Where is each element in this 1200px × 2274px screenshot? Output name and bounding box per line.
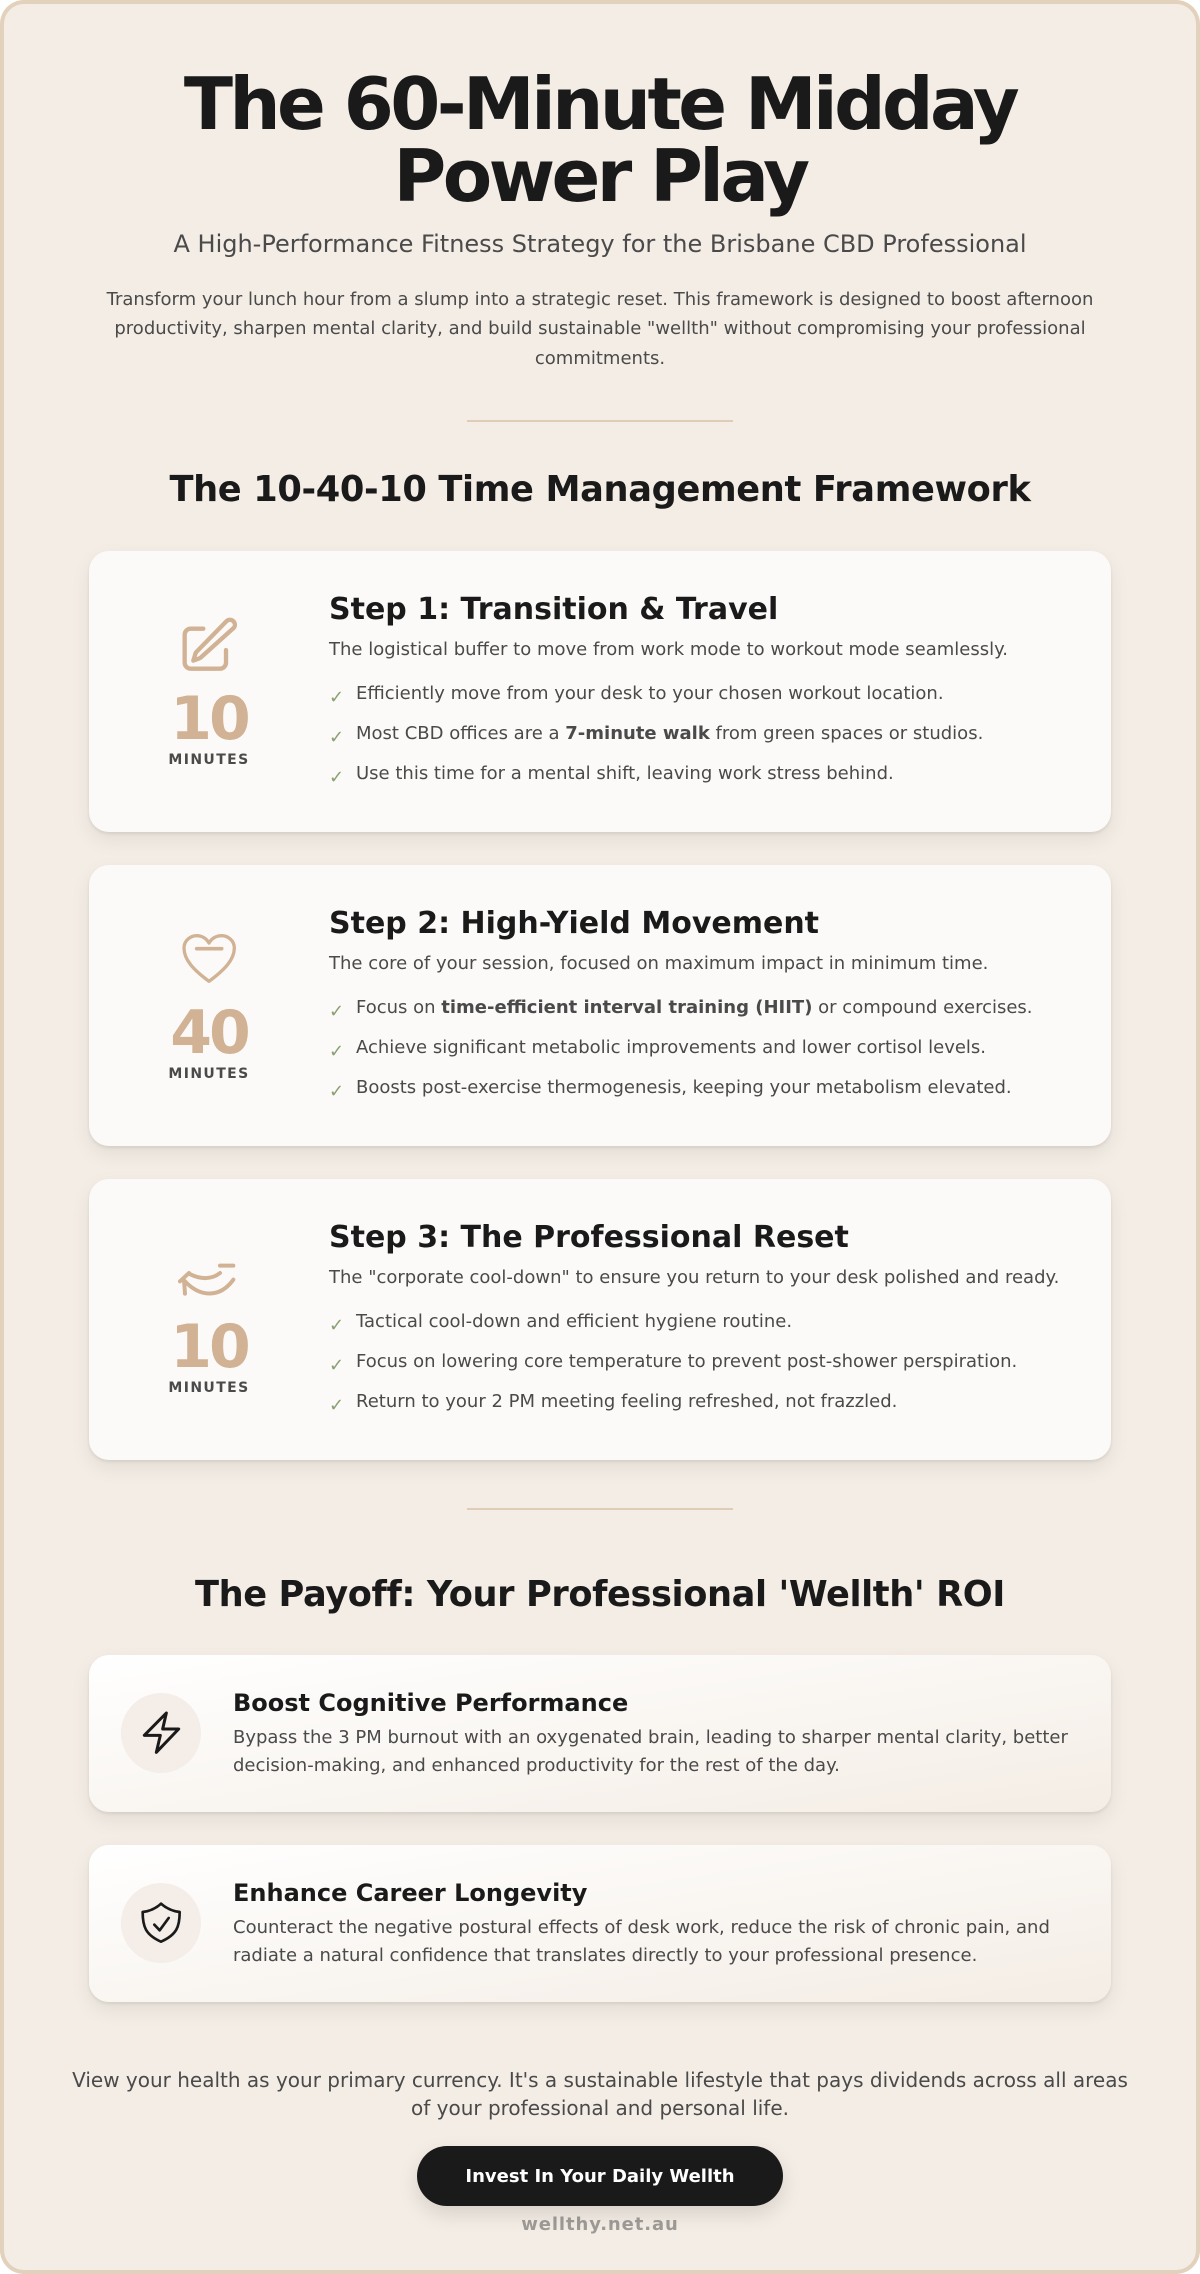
duration number: 40 [170, 998, 248, 1068]
panel: cognitive performance [89, 1655, 1111, 1812]
benefit text: Counteract the negative postural effects of desk work, reduce the risk of chronic pain, and [233, 1917, 1050, 1938]
title [184, 62, 1018, 218]
bullet: Most CBD offices are a 7-minute walk from green spaces or studios. [356, 723, 983, 744]
panel: step 3 [89, 1179, 1111, 1460]
step title: Step 2: High-Yield Movement [329, 906, 819, 941]
check: ✓ [329, 1041, 344, 1062]
benefit title: Enhance Career Longevity [233, 1879, 587, 1907]
icon: heart [182, 934, 236, 983]
closing text [72, 2068, 1128, 2120]
subtitle: A High-Performance Fitness Strategy for the Brisbane CBD Professional [173, 230, 1027, 258]
check: ✓ [329, 1001, 344, 1022]
panel: step 2 [89, 865, 1111, 1146]
closing text: View your health as your primary currency. It's a sustainable lifestyle that pays dividends across all areas [72, 2068, 1128, 2092]
intro paragraph: productivity, sharpen mental clarity, and build sustainable "wellth" without compromising your professional [114, 318, 1086, 339]
check: ✓ [329, 1395, 344, 1416]
intro paragraph: Transform your lunch hour from a slump into a strategic reset. This framework is designed to boost afternoon [107, 288, 1093, 310]
bullet: Efficiently move from your desk to your chosen workout location. [356, 683, 944, 704]
call-to-action button [417, 2146, 783, 2206]
check: ✓ [329, 767, 344, 788]
duration unit: MINUTES [168, 752, 250, 768]
duration unit: MINUTES [168, 1066, 250, 1082]
check: ✓ [329, 1355, 344, 1376]
website: wellthy.net.au [521, 2214, 679, 2235]
panel: career longevity [89, 1845, 1111, 2002]
bullet: Return to your 2 PM meeting feeling refreshed, not frazzled. [356, 1391, 897, 1412]
bullet: Focus on lowering core temperature to prevent post-shower perspiration. [356, 1351, 1017, 1372]
icon: cool-down arrow [178, 1264, 236, 1296]
icon: shield check [121, 1883, 201, 1963]
bullet: Boosts post-exercise thermogenesis, keeping your metabolism elevated. [356, 1077, 1012, 1098]
duration number: 10 [170, 684, 248, 754]
step description: The core of your session, focused on maximum impact in minimum time. [329, 953, 988, 974]
bullet: Achieve significant metabolic improvements and lower cortisol levels. [356, 1037, 986, 1058]
bullet: Use this time for a mental shift, leaving work stress behind. [356, 763, 894, 784]
check: ✓ [329, 1081, 344, 1102]
step title: Step 3: The Professional Reset [329, 1220, 849, 1255]
benefit text: radiate a natural confidence that translates directly to your professional presence. [233, 1945, 977, 1966]
benefit text: decision-making, and enhanced productivity for the rest of the day. [233, 1755, 840, 1776]
step description: The logistical buffer to move from work mode to workout mode seamlessly. [329, 639, 1008, 660]
duration unit: MINUTES [168, 1380, 250, 1396]
intro paragraph [106, 288, 1093, 369]
heading: framework: The 10-40-10 Time Management Framework [169, 469, 1031, 510]
icon: pencil and square [182, 618, 238, 671]
check: ✓ [329, 687, 344, 708]
heading: payoff: The Payoff: Your Professional 'Wellth' ROI [195, 1574, 1005, 1614]
closing text: of your professional and personal life. [411, 2096, 789, 2120]
intro paragraph: commitments. [535, 348, 665, 369]
benefit text [233, 1917, 1050, 1966]
step description: The "corporate cool-down" to ensure you return to your desk polished and ready. [329, 1267, 1059, 1288]
call-to-action button: Invest In Your Daily Wellth [465, 2166, 735, 2187]
check: ✓ [329, 727, 344, 748]
benefit text [233, 1727, 1068, 1776]
title: The 60-Minute Midday [184, 62, 1016, 146]
step title: Step 1: Transition & Travel [329, 592, 778, 627]
benefit title: Boost Cognitive Performance [233, 1689, 628, 1717]
benefit text: Bypass the 3 PM burnout with an oxygenated brain, leading to sharper mental clarity, better [233, 1727, 1068, 1748]
check: ✓ [329, 1315, 344, 1336]
title: Power Play [394, 134, 806, 218]
icon: lightning bolt [121, 1693, 201, 1773]
bullet: Focus on time-efficient interval training (HIIT) or compound exercises. [356, 997, 1033, 1018]
duration number: 10 [170, 1312, 248, 1382]
bullet: Tactical cool-down and efficient hygiene routine. [356, 1311, 792, 1332]
panel: step 1 [89, 551, 1111, 832]
